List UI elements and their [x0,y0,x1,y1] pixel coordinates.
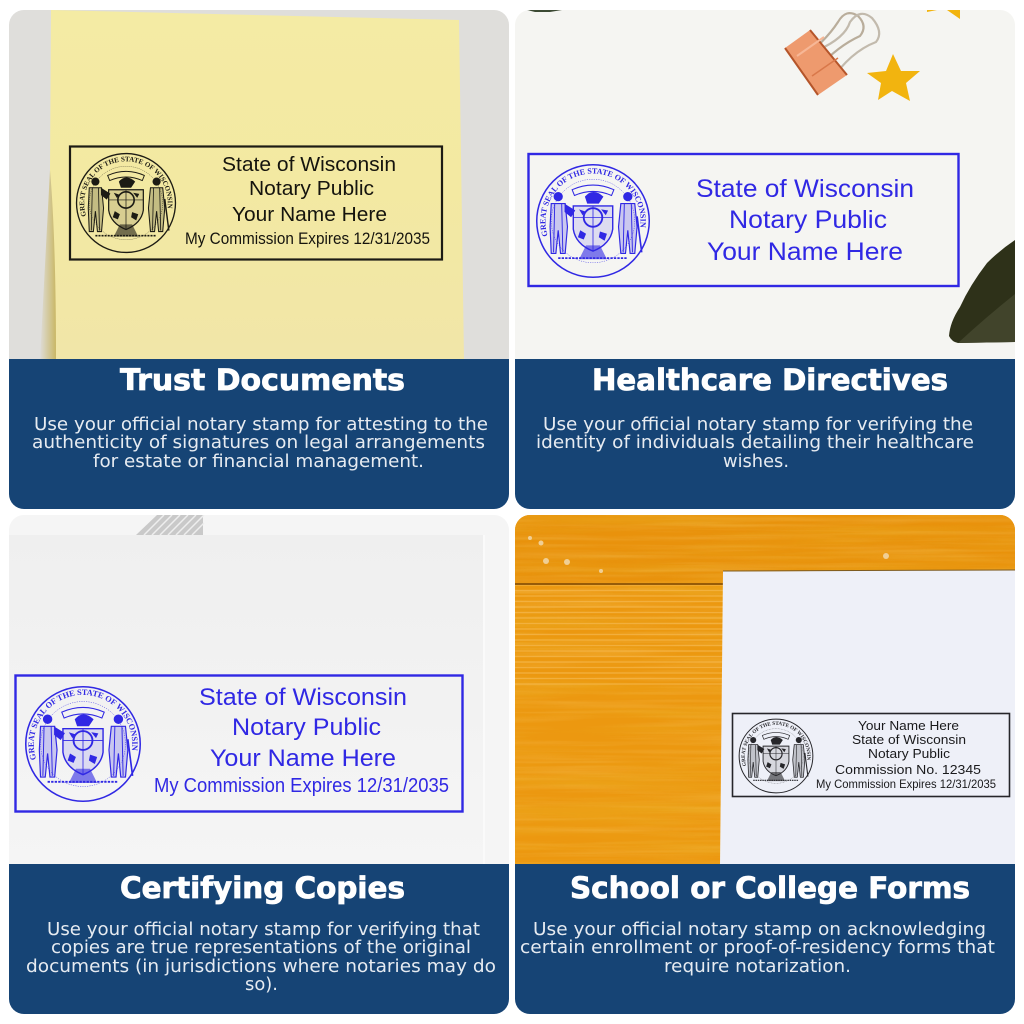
stamp impression: Notary Public [868,746,951,761]
body text: documents (in jurisdictions where notaries may do [26,956,496,977]
photo: white paper [9,515,509,865]
panel: certifying copies [9,515,509,1014]
seal [536,164,650,278]
seal: GREAT SEAL OF THE STATE OF WISCONSIN [80,156,172,216]
heading: Healthcare Directives [592,363,948,397]
body text: for estate or financial management. [93,451,424,472]
caption band [515,359,1015,509]
body text [538,416,973,468]
body text: Use your official notary stamp for attesting to the [34,414,488,435]
stamp impression: Your Name Here [210,745,396,772]
stamp impression: Your Name Here [707,238,903,266]
icon: star [867,54,920,101]
stamp impression [68,145,444,261]
body text: Use your official notary stamp for verifying that [47,919,480,940]
stamp impression [14,674,464,813]
seal [738,718,814,794]
seal: GREAT SEAL OF THE STATE OF WISCONSIN [540,168,646,236]
body text: wishes. [723,451,789,472]
body text: authenticity of signatures on legal arrangements [32,432,485,453]
heading: School or College Forms [570,871,970,905]
body text: Use your official notary stamp on acknowledging [533,919,986,940]
stamp impression: Notary Public [232,714,381,741]
stamp impression: Notary Public [729,206,887,234]
body text: copies are true representations of the original [51,937,471,958]
panel: healthcare directives [515,10,1015,509]
stamp impression: State of Wisconsin [696,175,914,203]
seal: GREAT SEAL OF THE STATE OF WISCONSIN [28,690,138,760]
stamp impression: My Commission Expires 12/31/2035 [185,229,430,248]
icon: leaf [949,240,1015,343]
photo: sticky note on wall [9,10,509,360]
body text [32,414,488,472]
stamp impression: My Commission Expires 12/31/2035 [154,775,449,797]
stamp impression [732,712,1010,798]
heading: Certifying Copies [120,871,405,905]
stamp impression: My Commission Expires 12/31/2035 [816,777,996,791]
stamp impression: State of Wisconsin [222,154,396,176]
icon: binder clip [785,13,879,95]
caption band [9,864,509,1014]
caption band [9,359,509,509]
stamp impression: Notary Public [249,178,374,200]
body text [520,919,995,977]
stamp impression: State of Wisconsin [852,732,966,747]
stamp impression: Your Name Here [232,204,387,226]
body text: identity of individuals detailing their healthcare [536,432,974,453]
body text [26,919,496,995]
body text: certain enrollment or proof-of-residency forms that [520,937,995,958]
icon: clipped star [927,10,960,19]
seal: GREAT SEAL OF THE STATE OF WISCONSIN [741,721,811,766]
stamp impression: State of Wisconsin [199,684,407,711]
panel: school or college forms [515,515,1015,1014]
panel: trust documents [9,10,509,509]
seal [76,152,176,254]
body text: require notarization. [664,956,851,977]
stamp impression: Your Name Here [858,718,959,733]
photo: desk with clip, stars, leaf [515,10,1015,360]
stamp impression: Commission No. 12345 [835,762,981,777]
heading: Trust Documents [120,363,405,397]
caption band [515,864,1015,1014]
stamp impression [527,152,960,288]
body text: Use your official notary stamp for verifying the [543,414,973,435]
seal [25,686,141,802]
body text: so). [245,974,278,995]
photo: wooden table with paper [515,515,1015,865]
